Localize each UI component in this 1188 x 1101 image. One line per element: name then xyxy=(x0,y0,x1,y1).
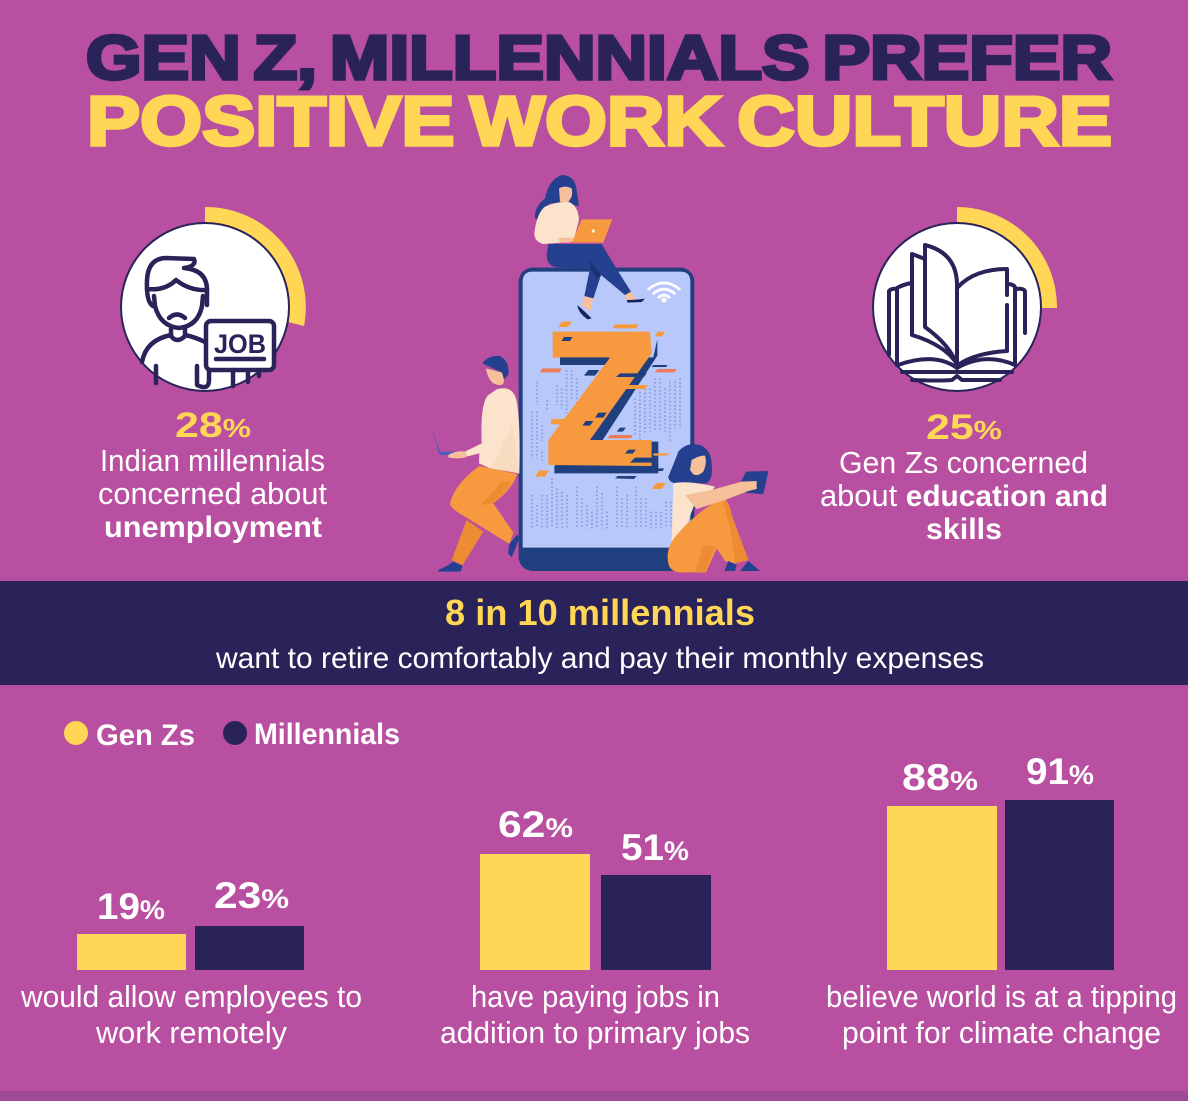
stat text xyxy=(98,406,327,544)
stat text: skills xyxy=(926,513,1002,546)
bar chart: climate change: believe world is at a tipping xyxy=(826,979,1177,1014)
gauge arc 28% xyxy=(205,207,306,326)
gauge arc 25% xyxy=(957,207,1057,308)
phone dot pattern xyxy=(532,370,680,528)
stat text: 28 % xyxy=(175,406,251,445)
panel: unemployment stat xyxy=(98,207,327,544)
banner: 8 in 10 millennials xyxy=(445,592,755,633)
bar chart: climate change: 88 % xyxy=(902,757,978,798)
illustration: phone and three young people xyxy=(432,175,768,572)
bar chart: paying jobs: 51% xyxy=(621,827,689,868)
bar chart: climate change: point for climate change xyxy=(842,1015,1161,1050)
stat text: Indian millennials xyxy=(100,443,325,478)
bar chart: paying jobs: addition to primary jobs xyxy=(440,1015,750,1050)
stat text: concerned about xyxy=(98,476,327,511)
legend: Millennials xyxy=(254,718,400,751)
panel: education stat xyxy=(820,207,1108,546)
title: POSITIVE WORK CULTURE xyxy=(87,82,1112,160)
bar chart: climate change: 91% xyxy=(1026,751,1094,792)
title: GEN Z, MILLENNIALS PREFER xyxy=(86,24,1112,93)
bar chart: remote work: 23% xyxy=(214,875,289,916)
bar chart: remote work: would allow employees to xyxy=(20,979,362,1014)
bar chart: paying jobs: have paying jobs in xyxy=(471,979,720,1014)
glitch letter Z xyxy=(535,322,677,489)
icon: open book xyxy=(873,223,1041,391)
man leaning on phone with laptop xyxy=(432,356,520,572)
bar chart: climate change xyxy=(826,751,1177,1050)
stat text: unemployment xyxy=(104,511,322,544)
banner xyxy=(0,581,1188,685)
legend: Gen Zs xyxy=(96,719,195,752)
title xyxy=(86,24,1112,160)
stat text: about education and xyxy=(820,478,1108,513)
bar chart: remote work: 19% xyxy=(97,886,165,927)
bar chart: remote work xyxy=(20,875,362,1050)
wifi icon xyxy=(649,283,679,301)
bar chart: paying jobs xyxy=(440,804,750,1050)
banner: want to retire comfortably and pay their monthly expenses xyxy=(215,642,984,675)
legend xyxy=(64,718,400,752)
stat text xyxy=(820,408,1108,546)
icon: worried job seeker xyxy=(121,223,289,391)
phone xyxy=(519,268,694,571)
footer strip xyxy=(0,1091,1188,1101)
bar chart: remote work: work remotely xyxy=(95,1015,287,1050)
bar chart: paying jobs: 62% xyxy=(498,804,573,845)
icon: worried job seeker: JOB xyxy=(214,329,266,359)
stat text: 25 % xyxy=(926,408,1002,447)
woman with laptop on top of phone xyxy=(534,175,645,319)
stat text: Gen Zs concerned xyxy=(839,445,1088,480)
woman sitting with tablet xyxy=(668,444,768,572)
